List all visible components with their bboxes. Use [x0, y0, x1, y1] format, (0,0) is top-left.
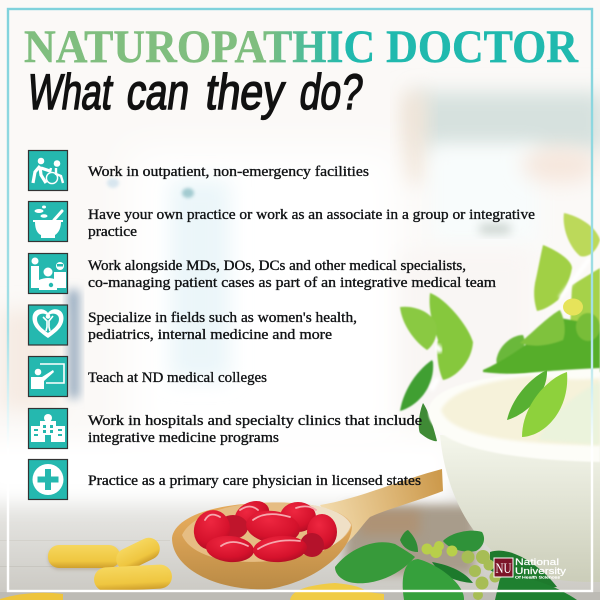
- icon: mortar and pestle with herbs: [28, 202, 68, 242]
- logo: National University of Health Sciences: National: [515, 557, 559, 567]
- icon: teacher at blackboard: [28, 356, 68, 396]
- yellow tablets: [0, 534, 384, 600]
- text: outpatient: Work in outpatient, non-emergency facilities: [88, 164, 369, 180]
- item 6: [28, 408, 422, 448]
- text: teach: Teach at ND medical colleges: [88, 370, 267, 386]
- item 6: integrative medicine programs: [88, 430, 279, 446]
- title: Naturopathic Doctor: NATUROPATHIC DOCTOR: [24, 21, 579, 73]
- item 1: [28, 150, 369, 190]
- logo: National University of Health Sciences: University: [515, 566, 567, 576]
- subtitle: What can they do?: [24, 64, 366, 120]
- text: own practice: Have your own practice or work as an associate in a group or integrative: [88, 207, 535, 223]
- icon: medical cross: [28, 460, 68, 500]
- item 2: [28, 202, 535, 242]
- icon: medical team: [28, 254, 68, 294]
- subtitle: What can they do?: can: [123, 64, 193, 120]
- icon: hospital building: [28, 408, 68, 448]
- subtitle: What can they do?: What: [24, 64, 116, 120]
- red capsules: [189, 496, 337, 564]
- text: primary care: Practice as a primary care physician in licensed states: [88, 473, 421, 489]
- subtitle: What can they do?: do?: [296, 64, 366, 120]
- logo: National University of Health Sciences: [494, 557, 567, 580]
- item 3: co-managing patient cases as part of an integrative medical team: [88, 275, 497, 291]
- subtitle: What can they do?: they: [202, 64, 289, 120]
- text: medical specialists: Work alongside MDs, DOs, DCs and other medical specialists,: [88, 258, 466, 274]
- icon: heart with figure: [28, 305, 68, 345]
- green leaves and buds: [335, 530, 577, 600]
- item 4: pediatrics, internal medicine and more: [88, 327, 332, 343]
- icon: caregiver pushing wheelchair: [28, 150, 68, 190]
- white bowl: [428, 368, 600, 582]
- item 5: [28, 356, 267, 396]
- plant leaves behind the bowl: [400, 213, 600, 441]
- item 3: [28, 254, 497, 294]
- logo: National University of Health Sciences: NU: [496, 561, 512, 577]
- text: hospitals: Work in hospitals and specialty clinics that include: [88, 413, 422, 429]
- wooden spoon with red capsules: [172, 469, 443, 589]
- item 4: [28, 305, 357, 345]
- item 2: practice: [88, 224, 137, 240]
- text: specialize: Specialize in fields such as women's health,: [88, 310, 357, 326]
- item 7: [28, 460, 421, 500]
- logo: National University of Health Sciences: Of Health Sciences: [515, 574, 560, 580]
